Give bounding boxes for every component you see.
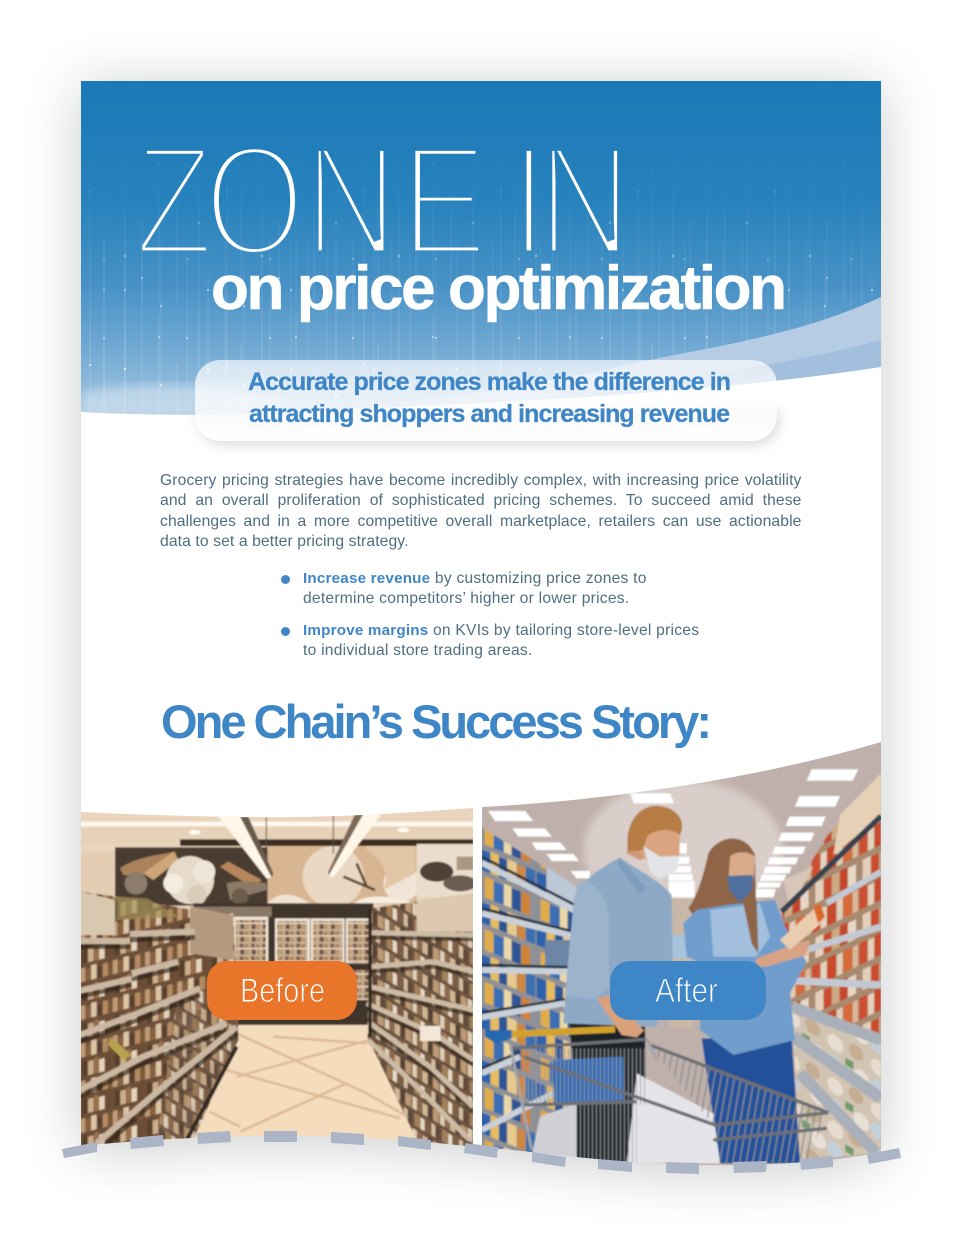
photo: after couple shopping [480,740,883,1173]
data rain texture [89,163,874,414]
title: ZONE IN: N [538,112,631,289]
floor [198,1024,415,1140]
photo: before store aisle [80,800,480,1153]
button: before: Before [240,972,325,1010]
pale wave [472,297,881,397]
light fixtures [218,814,382,879]
bullet: improve margins: to individual store trading areas. [303,642,533,659]
callout panel [195,360,777,441]
shelf shadows [80,937,237,1150]
subtitle: on price optimization: on price optimization [211,254,787,323]
freezers [193,903,373,1027]
bullet: increase revenue: Increase revenue by customizing price zones to [303,570,647,587]
button: before [207,961,357,1020]
title: ZONE IN: E [401,112,523,289]
mural ice cream [268,846,420,907]
title: ZONE IN: I [511,112,547,289]
button: after: After [655,972,718,1010]
mural vegetables [115,847,268,906]
header banner [81,81,881,415]
far aisle [670,898,693,1028]
callout text: Accurate price zones make the difference in [248,368,731,396]
intro paragraph: Grocery pricing strategies have become incredibly complex, with increasing price volatility [160,472,802,489]
title: ZONE IN: N [304,112,398,289]
title: ZONE IN: Z [134,112,214,289]
dashed curve [62,1131,901,1174]
white wave [81,367,881,425]
card [81,81,881,1165]
bullet: improve margins [281,622,699,659]
button: after [610,961,766,1020]
man [563,806,682,1163]
right shelves [367,893,473,1150]
intro paragraph: data to set a better pricing strategy. [160,533,409,550]
mural bowls [417,844,477,897]
heading: One Chain's Success Story: One Chain’s Success Story: [161,695,712,748]
wall left [80,852,115,895]
ceiling glow [581,781,786,900]
ceiling [80,822,473,846]
left shelves [80,892,238,1153]
callout text [248,368,731,428]
callout panel shadow [199,410,779,445]
title: ZONE IN: O [204,112,305,289]
card shadow [81,87,881,1171]
ceiling lights [488,769,858,897]
right shelves [782,773,881,1160]
woman [683,839,825,1163]
shopping cart [485,1029,828,1163]
left shelves [480,827,577,1157]
intro paragraph: and an overall proliferation of sophisticated pricing schemes. To succeed amid these [160,492,802,509]
bullet: increase revenue: determine competitors’ higher or lower prices. [303,590,629,607]
intro paragraph: challenges and in a more competitive overall marketplace, retailers can use actionable [160,513,802,530]
callout text: attracting shoppers and increasing revenue [249,400,730,428]
mesh glow [81,381,242,415]
intro paragraph [160,472,802,550]
bullet: improve margins: Improve margins on KVIs by tailoring store-level prices [303,622,699,639]
bullet: increase revenue [281,570,647,607]
